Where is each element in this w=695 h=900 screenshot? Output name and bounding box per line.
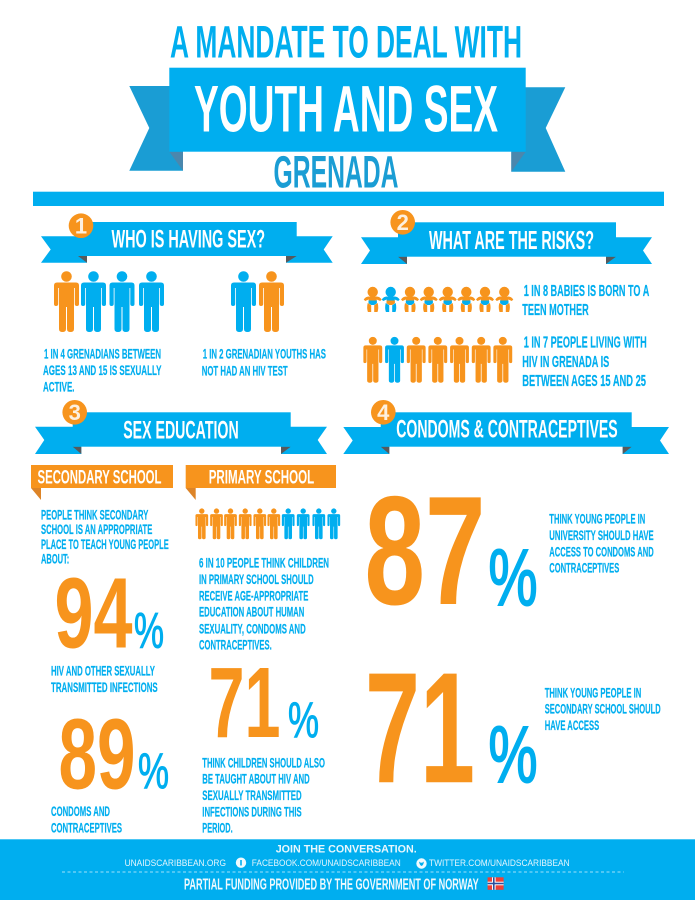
icon group: 1 in 7 people xyxy=(363,337,512,383)
text: HIV in primary: THINK CHILDREN SHOULD ALSO xyxy=(202,755,325,770)
text: babies: TEEN MOTHER xyxy=(522,302,589,319)
icon group: 1 in 2 people xyxy=(231,271,284,332)
text: 1 in 2: 1 IN 2 GRENADIAN YOUTHS HAS xyxy=(203,346,326,362)
stat: 87 percent: 87 xyxy=(364,464,486,637)
text: primary school xyxy=(199,556,329,652)
text: HIV in primary: SEXUALLY TRANSMITTED xyxy=(202,788,302,803)
text: condoms and contraceptives: CONTRACEPTIVES xyxy=(51,820,122,835)
text: primary school: CONTRACEPTIVES. xyxy=(199,637,272,652)
panel: sex education xyxy=(31,400,340,836)
ribbon: who is having sex xyxy=(41,213,333,263)
text: condoms and contraceptives xyxy=(51,804,122,835)
ribbon: sex education: 3 xyxy=(69,400,81,425)
text: secondary intro: PLACE TO TEACH YOUNG PEOPLE xyxy=(41,537,169,552)
text: 1 in 4 xyxy=(43,346,162,394)
icon group: 6 in 10 people xyxy=(195,508,340,539)
header bar xyxy=(33,192,664,206)
banner: secondary school xyxy=(31,465,173,500)
text: HIV and infections: HIV AND OTHER SEXUALLY xyxy=(51,664,155,679)
stat: 71 percent primary: 71 xyxy=(208,647,280,759)
text: HIV in primary: BE TAUGHT ABOUT HIV AND xyxy=(202,772,310,787)
footer xyxy=(0,839,695,900)
text: 1 in 4: 1 IN 4 GRENADIANS BETWEEN xyxy=(44,346,161,362)
link: facebook: FACEBOOK.COM/UNAIDSCARIBBEAN xyxy=(252,858,401,869)
ribbon: what are the risks xyxy=(361,210,652,264)
text: 1 in 4: AGES 13 AND 15 IS SEXUALLY xyxy=(43,363,162,378)
text: primary school: RECEIVE AGE-APPROPRIATE xyxy=(199,588,308,603)
text: university: CONTRACEPTIVES xyxy=(549,560,619,575)
text: 1 in 2: NOT HAD AN HIV TEST xyxy=(202,363,288,378)
text: HIV: HIV IN GRENADA IS xyxy=(522,354,609,371)
text: primary school: IN PRIMARY SCHOOL SHOULD xyxy=(199,572,314,587)
text: HIV and infections xyxy=(51,664,158,695)
icon group: babies xyxy=(364,287,513,312)
footer heading: JOIN THE CONVERSATION. xyxy=(276,843,417,855)
text: HIV xyxy=(522,335,647,390)
panel: who is having sex xyxy=(41,213,333,394)
text: HIV and infections: TRANSMITTED INFECTIONS xyxy=(51,680,158,695)
ribbon: sex education xyxy=(35,400,327,454)
ribbon: what are the risks: 2 xyxy=(397,210,409,235)
stat: 87 percent: % xyxy=(488,533,538,622)
stat: 71 percent secondary: % xyxy=(488,710,538,799)
header xyxy=(33,16,664,206)
banner: secondary school: SECONDARY SCHOOL xyxy=(38,466,162,488)
text: primary school: 6 IN 10 PEOPLE THINK CHILDREN xyxy=(199,556,329,571)
text: secondary intro: SCHOOL IS AN APPROPRIATE xyxy=(41,522,152,537)
text: HIV in primary: PERIOD. xyxy=(202,821,233,836)
ribbon: who is having sex: 1 xyxy=(75,214,87,238)
text: 1 in 4: ACTIVE. xyxy=(43,380,74,394)
ribbon: condoms and contraceptives: 4 xyxy=(377,400,390,425)
text: secondary access: HAVE ACCESS xyxy=(545,718,599,733)
stat: 89 percent: 89 xyxy=(58,698,136,810)
text: HIV in primary: INFECTIONS DURING THIS xyxy=(202,804,302,819)
text: primary school: EDUCATION ABOUT HUMAN xyxy=(199,605,304,620)
stat: 94 percent: % xyxy=(134,602,164,658)
panel: what are the risks xyxy=(361,210,652,390)
icon: facebook xyxy=(236,858,246,868)
text: HIV in primary xyxy=(202,755,325,836)
text: secondary access xyxy=(545,685,661,733)
subtitle: Grenada: GRENADA xyxy=(274,146,398,198)
panel: condoms and contraceptives xyxy=(343,400,669,816)
banner: primary school xyxy=(186,465,336,500)
funding note: PARTIAL FUNDING PROVIDED BY THE GOVERNMENT OF NORWAY xyxy=(184,876,479,893)
ribbon: who is having sex: WHO IS HAVING SEX? xyxy=(112,225,265,253)
link: website: UNAIDSCARIBBEAN.ORG xyxy=(125,858,226,869)
text: condoms and contraceptives: CONDOMS AND xyxy=(51,804,110,819)
stat: 89 percent: % xyxy=(138,743,169,799)
icon: twitter xyxy=(416,858,427,869)
stat: 71 percent secondary: 71 xyxy=(365,640,475,816)
text: 1 in 2 xyxy=(202,346,326,378)
stat: 94 percent: 94 xyxy=(54,558,133,670)
text: primary school: SEXUALITY, CONDOMS AND xyxy=(199,621,306,636)
link: twitter: TWITTER.COM/UNAIDSCARIBBEAN xyxy=(429,858,570,869)
text: secondary intro: ABOUT: xyxy=(41,552,69,567)
banner: primary school: PRIMARY SCHOOL xyxy=(209,466,314,488)
ribbon: condoms and contraceptives xyxy=(343,400,669,454)
text: university xyxy=(549,511,654,575)
ribbon: sex education: SEX EDUCATION xyxy=(123,416,239,444)
main title ribbon xyxy=(129,68,565,172)
text: babies xyxy=(522,283,650,319)
text: secondary intro: PEOPLE THINK SECONDARY xyxy=(41,507,148,522)
icon group: 1 in 4 people xyxy=(54,271,164,332)
text: secondary intro xyxy=(41,507,169,567)
icon: Norway flag xyxy=(488,877,504,890)
stat: 71 percent primary: % xyxy=(288,692,319,748)
